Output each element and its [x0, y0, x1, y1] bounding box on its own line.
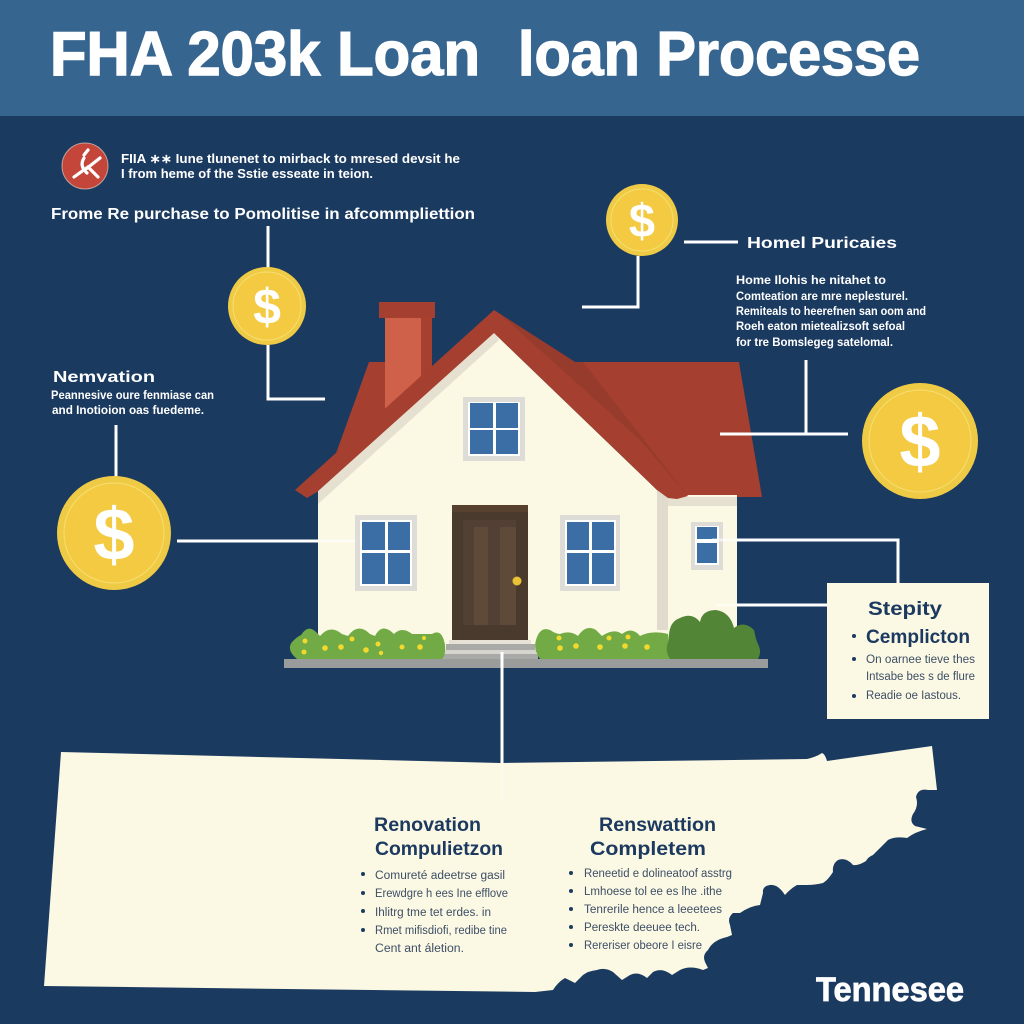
title	[50, 20, 920, 89]
callout: step completion	[827, 583, 989, 719]
house illustration	[284, 302, 768, 668]
title: FHA 203k Loan	[50, 20, 480, 89]
text block: renovation completion right: Pereskte deeuee tech.	[584, 922, 700, 934]
text block: renovation completion left: Comureté adeetrse gasil	[375, 870, 505, 882]
text block: renovation completion left: Ihlitrg tme tet erdes. in	[375, 907, 491, 919]
door	[452, 505, 528, 640]
steps	[442, 640, 538, 659]
intro text: FIIA ∗∗ Iune tlunenet to mirback to mresed devsit he	[121, 152, 460, 166]
text block: renovation completion right: Completem	[590, 839, 706, 860]
coin: left	[57, 476, 171, 590]
text block: renovation completion left: Erewdgre h ees Ine efflove	[375, 888, 508, 900]
coin: right: $	[899, 400, 941, 483]
intro text: I from heme of the Sstie esseate in teion.	[121, 167, 373, 181]
text block: renovation: Peannesive oure fenmiase can	[51, 388, 214, 402]
main wall	[318, 333, 657, 655]
left hedge	[290, 628, 445, 659]
text block: renovation completion right: Reneetid e dolineatoof asstrg	[584, 868, 732, 880]
gable trim	[318, 331, 499, 504]
connector: house to map	[500, 652, 504, 800]
connector lines over house	[318, 434, 848, 605]
text block: renovation completion right	[569, 815, 732, 952]
state label: Tennesee	[816, 971, 964, 1009]
right window	[560, 515, 620, 591]
dark shrub	[667, 610, 760, 659]
text block: renovation completion left	[361, 815, 508, 955]
icon: red alert badge	[62, 143, 108, 189]
text block: home purchase: Roeh eaton mietealizsoft sefoal	[736, 319, 905, 333]
back roof left	[330, 362, 385, 470]
text block: renovation: Nemvation	[53, 369, 155, 386]
text block: renovation completion right: Tenrerile hence a leeetees	[584, 904, 722, 916]
text block: renovation: and Inotioion oas fuedeme.	[52, 403, 204, 417]
left window	[355, 515, 417, 591]
subheading: Frome Re purchase to Pomolitise in afcommpliettion	[51, 206, 475, 223]
text block: home purchase: Remiteals to heerefnen san oom and	[736, 304, 926, 318]
text block: renovation completion left: Compulietzon	[375, 839, 503, 860]
text block: renovation completion right: Renswattion	[599, 815, 716, 836]
coin: top centre: $	[629, 194, 655, 247]
intro text	[121, 152, 460, 181]
callout: step completion: Intsabe bes s de flure	[866, 671, 975, 683]
ground slab	[284, 659, 768, 668]
text block: renovation completion left: Renovation	[374, 815, 481, 836]
text block: home purchase: Comteation are mre neplesturel.	[736, 289, 908, 303]
coin: left: $	[93, 493, 135, 576]
roof gable	[295, 310, 688, 499]
annex window	[691, 522, 723, 570]
connector lines	[116, 226, 898, 605]
text block: home purchase: Home Ilohis he nitahet to	[736, 273, 886, 287]
text block: home purchase: Homel Puricaies	[747, 235, 897, 252]
header banner	[0, 0, 1024, 116]
callout: step completion: On oarnee tieve thes	[866, 654, 975, 666]
text block: renovation completion left: Rmet mifisdiofi, redibe tine	[375, 925, 507, 937]
text block: renovation completion right: Rereriser obeore I eisre	[584, 940, 702, 952]
coin: top centre	[606, 184, 678, 256]
middle hedge	[535, 628, 672, 659]
callout: step completion: Cemplicton	[866, 627, 970, 648]
coin: right	[862, 383, 978, 499]
text block: home purchase: for tre Bomslegeg satelomal.	[736, 335, 893, 349]
coin: top left	[228, 267, 306, 345]
annex wall	[657, 495, 737, 655]
map: Tennessee state shape	[44, 746, 937, 992]
title: loan Processe	[518, 20, 920, 89]
callout: step completion: Stepity	[868, 599, 942, 620]
upper window	[463, 397, 525, 461]
text block: renovation	[51, 369, 214, 417]
chimney	[379, 302, 435, 415]
text block: renovation completion left: Cent ant áletion.	[375, 943, 464, 955]
callout: step completion: Readie oe Iastous.	[866, 690, 961, 702]
text block: home purchase	[736, 235, 926, 349]
text block: renovation completion right: Lmhoese tol ee es lhe .ithe	[584, 886, 722, 898]
coin: top left: $	[253, 279, 281, 335]
roof right wing	[560, 362, 762, 497]
